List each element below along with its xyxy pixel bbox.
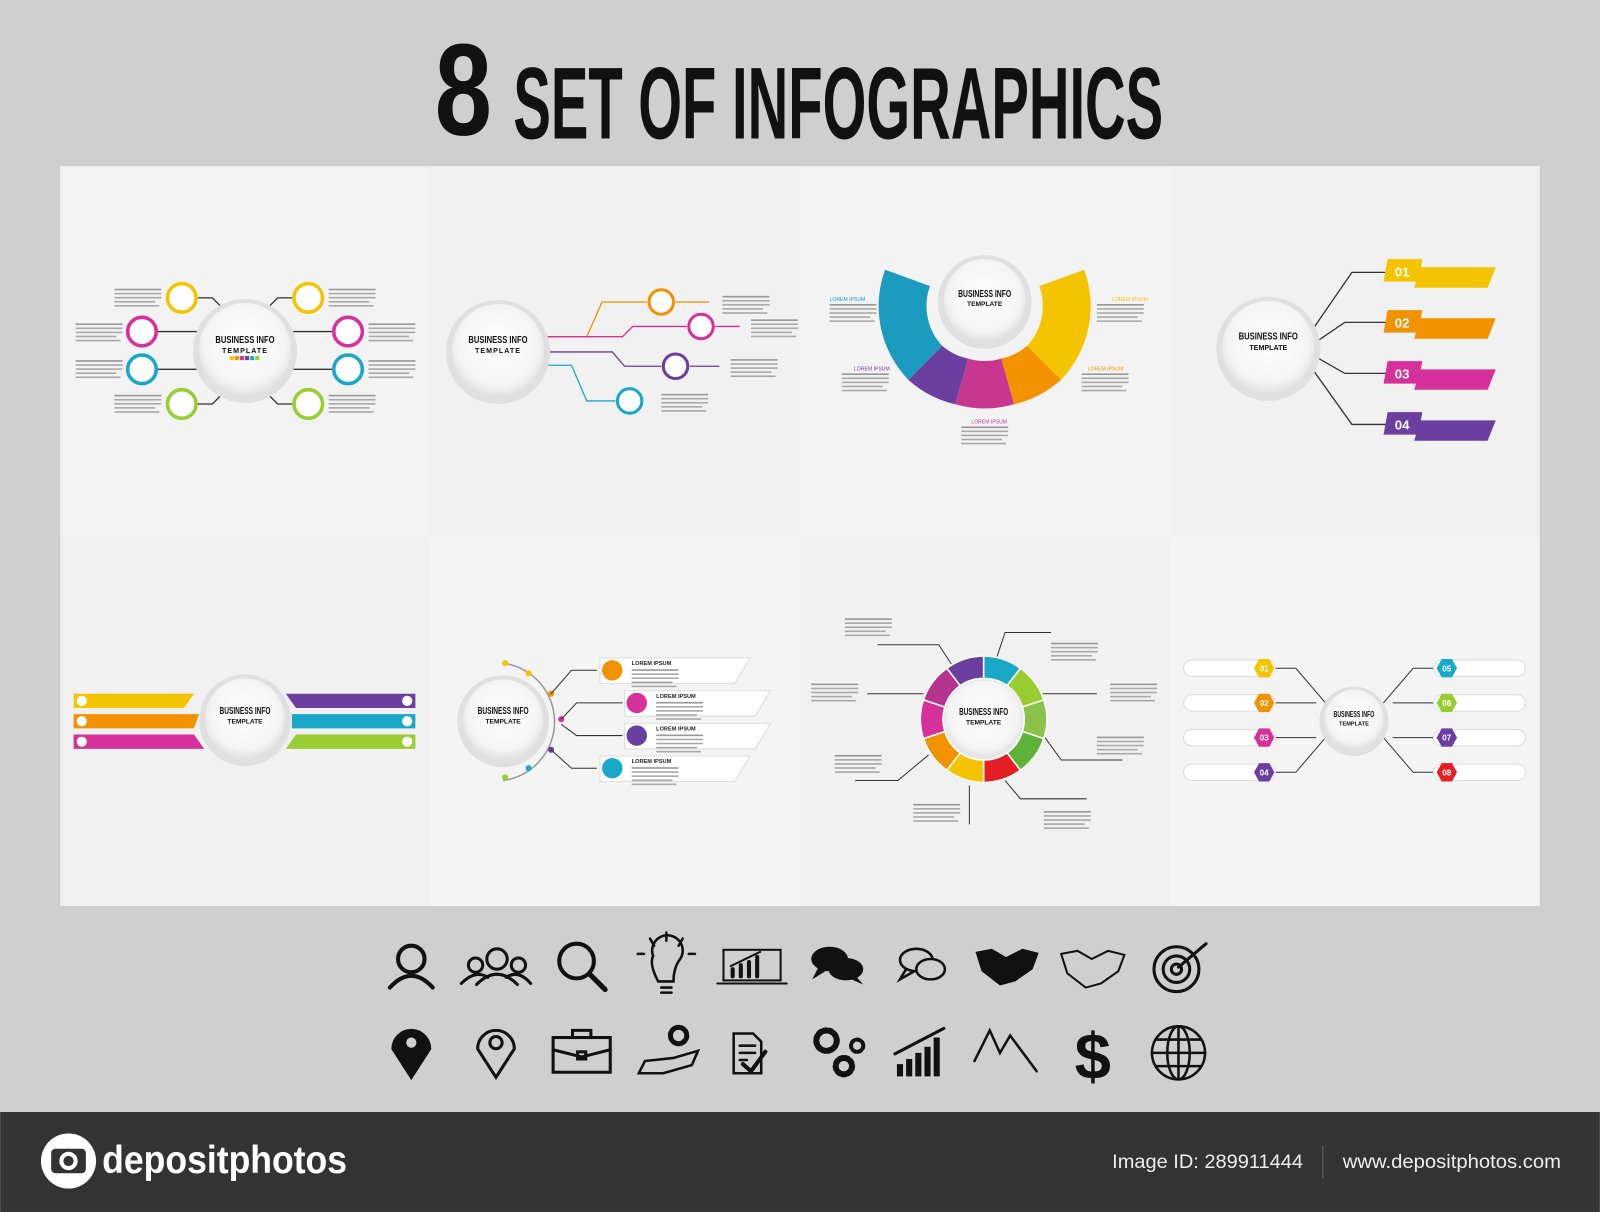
icon: handshake outline bbox=[1061, 951, 1124, 988]
panel 8: hexagon lists: 01 bbox=[1260, 664, 1269, 673]
panel 8: hexagon lists: 08 bbox=[1442, 768, 1452, 777]
center label: TEMPLATE bbox=[486, 718, 521, 725]
panel 8: hexagon lists bbox=[1184, 659, 1525, 781]
center label bbox=[1334, 710, 1374, 727]
panel 8: hexagon lists: 04 bbox=[1260, 768, 1269, 777]
center label: TEMPLATE bbox=[1339, 721, 1369, 727]
center label: BUSINESS INFO bbox=[1334, 710, 1374, 719]
panels background grid bbox=[60, 166, 1540, 906]
icon: hand gear bbox=[639, 1027, 698, 1073]
panel 6: arc with tabs bbox=[457, 658, 770, 785]
icon: zigzag bbox=[974, 1030, 1037, 1071]
center label bbox=[220, 706, 271, 725]
logo bbox=[41, 1133, 347, 1189]
panel 3: semicircle donut: LOREM IPSUM bbox=[971, 419, 1007, 425]
url: www.depositphotos.com bbox=[1342, 1151, 1561, 1173]
panel 8: hexagon lists: 03 bbox=[1260, 734, 1269, 743]
panel 3: semicircle donut: LOREM IPSUM bbox=[854, 366, 890, 372]
center label: TEMPLATE bbox=[967, 301, 1003, 308]
panel 8: hexagon lists: 07 bbox=[1442, 734, 1452, 743]
panel 6: arc with tabs: LOREM IPSUM bbox=[632, 759, 672, 765]
center label: TEMPLATE bbox=[1249, 344, 1287, 352]
center label: TEMPLATE bbox=[966, 719, 1002, 726]
image id: Image ID: 289911444 bbox=[1112, 1151, 1303, 1173]
icon: laptop chart bbox=[717, 950, 787, 983]
panel 4: ribbons: 03 bbox=[1395, 366, 1410, 381]
icon: map pin filled bbox=[393, 1030, 430, 1077]
panel 3: semicircle donut: LOREM IPSUM bbox=[830, 297, 865, 303]
panel 8: hexagon lists: 02 bbox=[1260, 699, 1269, 708]
center label: BUSINESS INFO bbox=[959, 707, 1008, 718]
center label: TEMPLATE bbox=[475, 347, 521, 355]
center label bbox=[215, 335, 275, 360]
icon: growth bars bbox=[895, 1028, 944, 1076]
icon: chat outline bbox=[900, 949, 945, 979]
panel 3: semicircle donut: LOREM IPSUM bbox=[1088, 366, 1123, 372]
panel 6: arc with tabs: LOREM IPSUM bbox=[632, 661, 672, 667]
panel 1: circle mind map bbox=[76, 284, 415, 418]
panel 4: ribbons: 01 bbox=[1395, 264, 1410, 279]
center label: BUSINESS INFO bbox=[1239, 332, 1298, 343]
panel 4: ribbons: 04 bbox=[1395, 418, 1410, 433]
panel 3: semicircle donut bbox=[830, 255, 1148, 444]
icon: handshake filled bbox=[975, 949, 1039, 986]
panel 4: ribbons bbox=[1216, 259, 1496, 441]
title bbox=[435, 17, 1163, 163]
icon row 2 bbox=[393, 1019, 1205, 1092]
panel 3: semicircle donut: LOREM IPSUM bbox=[1112, 297, 1148, 303]
icon: person bbox=[390, 946, 433, 988]
center label bbox=[478, 706, 529, 725]
panel 4: ribbons: 02 bbox=[1395, 315, 1410, 330]
center label bbox=[468, 335, 528, 355]
title: 8 bbox=[435, 17, 492, 163]
icon: group bbox=[461, 949, 531, 984]
center label: BUSINESS INFO bbox=[958, 289, 1011, 300]
center label: BUSINESS INFO bbox=[220, 706, 271, 717]
icon: briefcase bbox=[553, 1030, 610, 1072]
panel 8: hexagon lists: 06 bbox=[1442, 699, 1452, 708]
panel 2: timeline lines bbox=[446, 290, 798, 413]
center label: BUSINESS INFO bbox=[215, 335, 275, 346]
panel 5: horizontal bars bbox=[74, 674, 415, 766]
panel 6: arc with tabs: LOREM IPSUM bbox=[656, 726, 696, 732]
center label: TEMPLATE bbox=[227, 718, 263, 725]
center label: BUSINESS INFO bbox=[468, 335, 528, 346]
icon: dollar: $ bbox=[1075, 1019, 1111, 1092]
icon: chat filled bbox=[811, 947, 863, 984]
icon: gears bbox=[816, 1030, 863, 1074]
logo: depositphotos bbox=[102, 1139, 347, 1182]
icon: magnifier bbox=[559, 944, 605, 990]
center label: BUSINESS INFO bbox=[478, 706, 529, 717]
icon: bulb bbox=[638, 932, 695, 993]
icon: map pin outline bbox=[478, 1030, 514, 1077]
footer bar bbox=[0, 1112, 1600, 1212]
center label bbox=[959, 707, 1008, 726]
icon row 1 bbox=[390, 932, 1206, 993]
panel 6: arc with tabs: LOREM IPSUM bbox=[656, 694, 696, 700]
icon: document check bbox=[734, 1033, 765, 1073]
center label bbox=[1239, 332, 1298, 352]
icon: target bbox=[1154, 944, 1206, 992]
icon: globe bbox=[1152, 1026, 1205, 1079]
panel 7: ring chart bbox=[811, 618, 1157, 829]
panel 8: hexagon lists: 05 bbox=[1442, 664, 1452, 673]
center label: TEMPLATE bbox=[222, 347, 268, 355]
center label bbox=[958, 289, 1011, 308]
